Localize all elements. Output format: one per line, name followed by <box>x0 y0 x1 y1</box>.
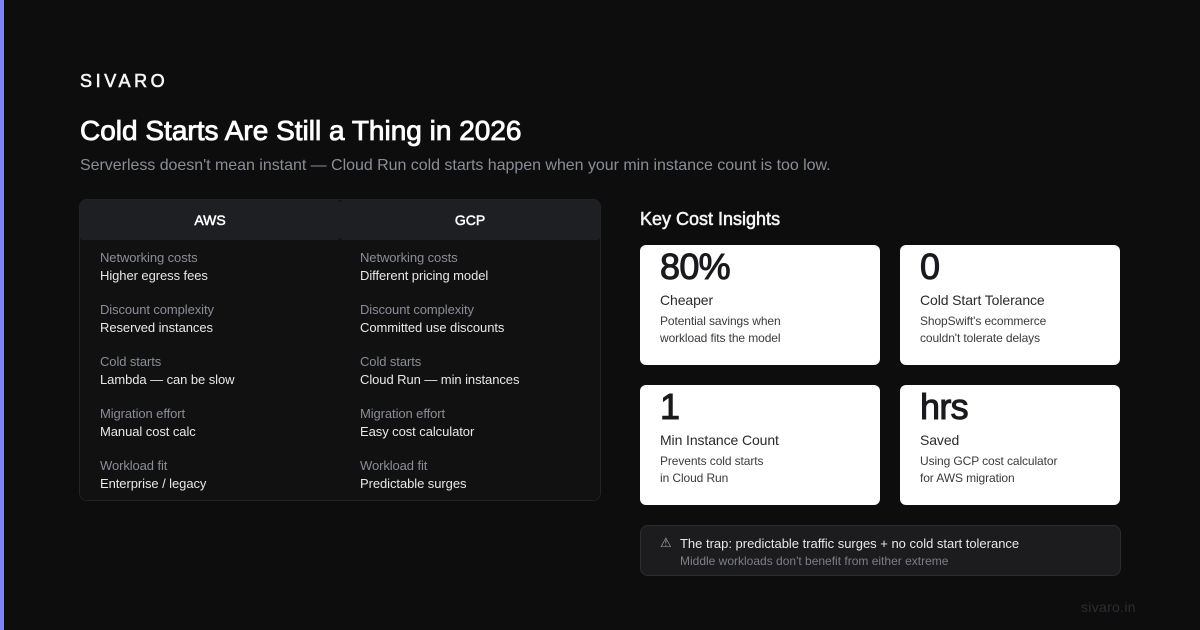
card: 80% cheaper <box>640 245 880 365</box>
card: 1 min instance: 1 <box>660 386 679 427</box>
row: GCP migration effort: Migration effort <box>360 406 445 421</box>
row: AWS discount complexity: Reserved instances <box>100 320 213 335</box>
callout detail: Middle workloads don't benefit from either extreme <box>680 554 948 568</box>
row: GCP migration effort: Easy cost calculator <box>360 424 474 439</box>
card: 1 min instance <box>640 385 880 505</box>
card: hrs saved: for AWS migration <box>920 471 1015 485</box>
row: GCP networking costs: Different pricing model <box>360 268 488 283</box>
row: GCP migration effort <box>340 396 600 448</box>
row: AWS networking costs <box>80 240 340 292</box>
row: GCP workload fit <box>340 448 600 500</box>
card: hrs saved: Saved <box>920 432 959 448</box>
row: AWS cold starts: Lambda — can be slow <box>100 372 234 387</box>
card: 1 min instance: Min Instance Count <box>660 432 779 448</box>
card: 0 tolerance: Cold Start Tolerance <box>920 292 1045 308</box>
header: GCP: GCP <box>455 212 485 228</box>
card: 80% cheaper: Cheaper <box>660 292 713 308</box>
card: hrs saved: Using GCP cost calculator <box>920 454 1057 468</box>
row: AWS migration effort <box>80 396 340 448</box>
callout: the trap <box>640 525 1121 576</box>
card: hrs saved <box>900 385 1120 505</box>
header: AWS <box>80 200 340 240</box>
accent bar <box>0 0 4 630</box>
card: 80% cheaper: workload fits the model <box>660 331 780 345</box>
footer url: sivaro.in <box>1081 599 1136 615</box>
row: AWS networking costs: Networking costs <box>100 250 198 265</box>
row: GCP networking costs: Networking costs <box>360 250 458 265</box>
subtitle: Serverless doesn't mean instant — Cloud Run cold starts happen when your min instance count is too low. <box>80 157 831 174</box>
row: AWS discount complexity <box>80 292 340 344</box>
row: GCP workload fit: Predictable surges <box>360 476 466 491</box>
card: 1 min instance: in Cloud Run <box>660 471 728 485</box>
panel: comparison table <box>79 199 601 501</box>
brand logo: SIVARO <box>80 71 168 91</box>
row: AWS migration effort: Migration effort <box>100 406 185 421</box>
card: 0 tolerance: ShopSwift's ecommerce <box>920 314 1046 328</box>
row: AWS workload fit <box>80 448 340 500</box>
row: AWS cold starts: Cold starts <box>100 354 161 369</box>
row: GCP discount complexity: Discount complexity <box>360 302 474 317</box>
card: 0 tolerance <box>900 245 1120 365</box>
card: 80% cheaper: 80% <box>660 246 730 287</box>
row: GCP discount complexity: Committed use discounts <box>360 320 504 335</box>
row: GCP cold starts <box>340 344 600 396</box>
row: AWS cold starts <box>80 344 340 396</box>
card: 0 tolerance: 0 <box>920 246 939 287</box>
section heading: Key Cost Insights <box>640 209 780 229</box>
row: GCP cold starts: Cloud Run — min instances <box>360 372 519 387</box>
row: AWS networking costs: Higher egress fees <box>100 268 208 283</box>
row: GCP networking costs <box>340 240 600 292</box>
row: AWS migration effort: Manual cost calc <box>100 424 196 439</box>
title: Cold Starts Are Still a Thing in 2026 <box>80 115 522 146</box>
callout heading: The trap: predictable traffic surges + no cold start tolerance <box>680 536 1019 551</box>
card: 1 min instance: Prevents cold starts <box>660 454 763 468</box>
card: 80% cheaper: Potential savings when <box>660 314 781 328</box>
row: GCP cold starts: Cold starts <box>360 354 421 369</box>
header: GCP <box>340 200 600 240</box>
row: AWS workload fit: Workload fit <box>100 458 167 473</box>
row: GCP workload fit: Workload fit <box>360 458 427 473</box>
card: 0 tolerance: couldn't tolerate delays <box>920 331 1040 345</box>
row: AWS workload fit: Enterprise / legacy <box>100 476 206 491</box>
row: GCP discount complexity <box>340 292 600 344</box>
card: hrs saved: hrs <box>920 386 968 427</box>
row: AWS discount complexity: Discount complexity <box>100 302 214 317</box>
header: AWS: AWS <box>194 212 226 228</box>
icon: warning: ⚠ <box>660 536 672 551</box>
